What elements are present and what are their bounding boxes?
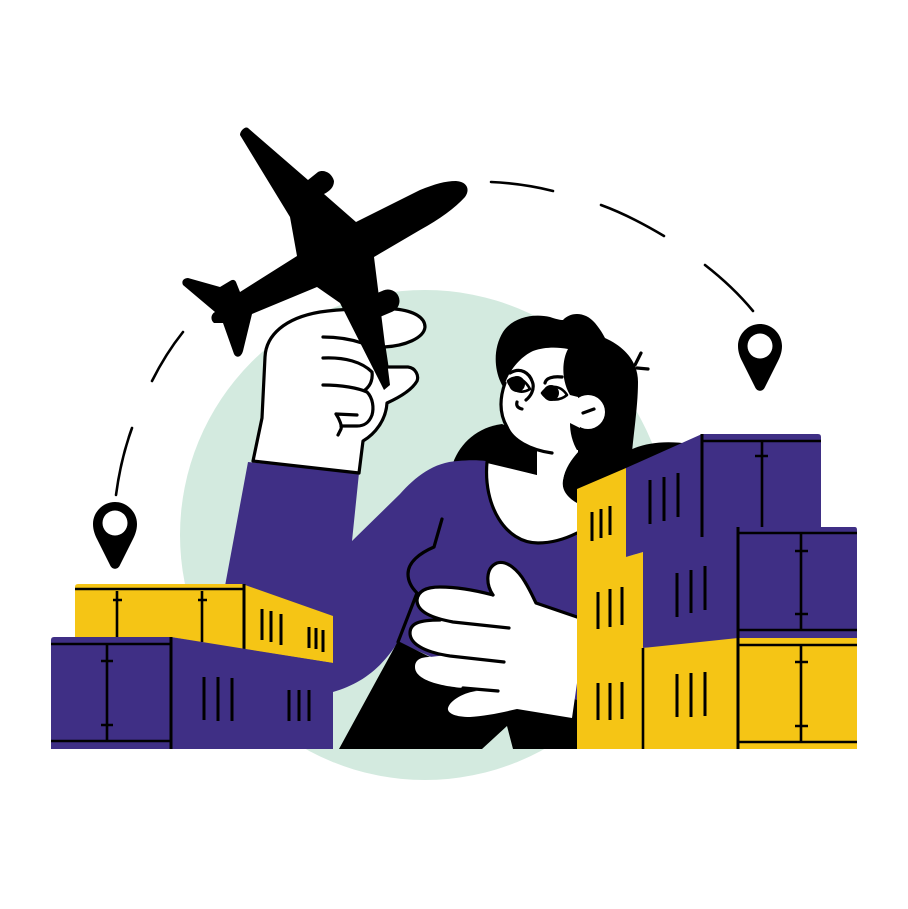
engine [374, 301, 388, 307]
woman figure [225, 314, 690, 749]
face [501, 348, 580, 453]
black shoulder hair [453, 424, 540, 480]
right eye [542, 377, 567, 401]
black trousers [339, 641, 577, 749]
yellow container lines [75, 584, 323, 652]
right location pin [738, 324, 782, 391]
left eye [508, 370, 533, 400]
nose [517, 402, 522, 409]
background circle [180, 290, 670, 780]
chin outline [501, 383, 552, 453]
tall yellow stack [577, 468, 643, 749]
lower hand [410, 562, 577, 718]
second finger [410, 620, 504, 662]
purple container front [51, 637, 171, 749]
lower yellow side [643, 638, 738, 749]
hair pin [635, 353, 648, 369]
ear line [583, 409, 594, 413]
neckline [487, 462, 577, 543]
lower yellow front [738, 638, 857, 749]
yellow container front [75, 584, 245, 650]
chest contour [398, 519, 442, 642]
airplane [182, 128, 468, 390]
raised hand [253, 309, 425, 473]
top purple container [626, 434, 857, 648]
third finger line [463, 688, 498, 691]
left location pin [93, 502, 137, 569]
right container lines [643, 434, 857, 749]
left containers [51, 584, 333, 749]
yellow container side [244, 585, 333, 663]
purple torso and sleeve [225, 460, 577, 725]
right shoulder shadow [620, 442, 690, 475]
right containers [577, 434, 857, 749]
purple container lines [51, 637, 309, 749]
yellow stack hatches [592, 506, 622, 720]
hand outline [488, 562, 577, 617]
top finger [417, 587, 509, 628]
purple container side [171, 637, 333, 749]
white chest [487, 450, 578, 543]
ear [571, 395, 605, 429]
finger lines [323, 337, 362, 343]
collar shadow [487, 440, 537, 475]
dashed flight path [116, 182, 753, 495]
back hair [496, 314, 640, 505]
